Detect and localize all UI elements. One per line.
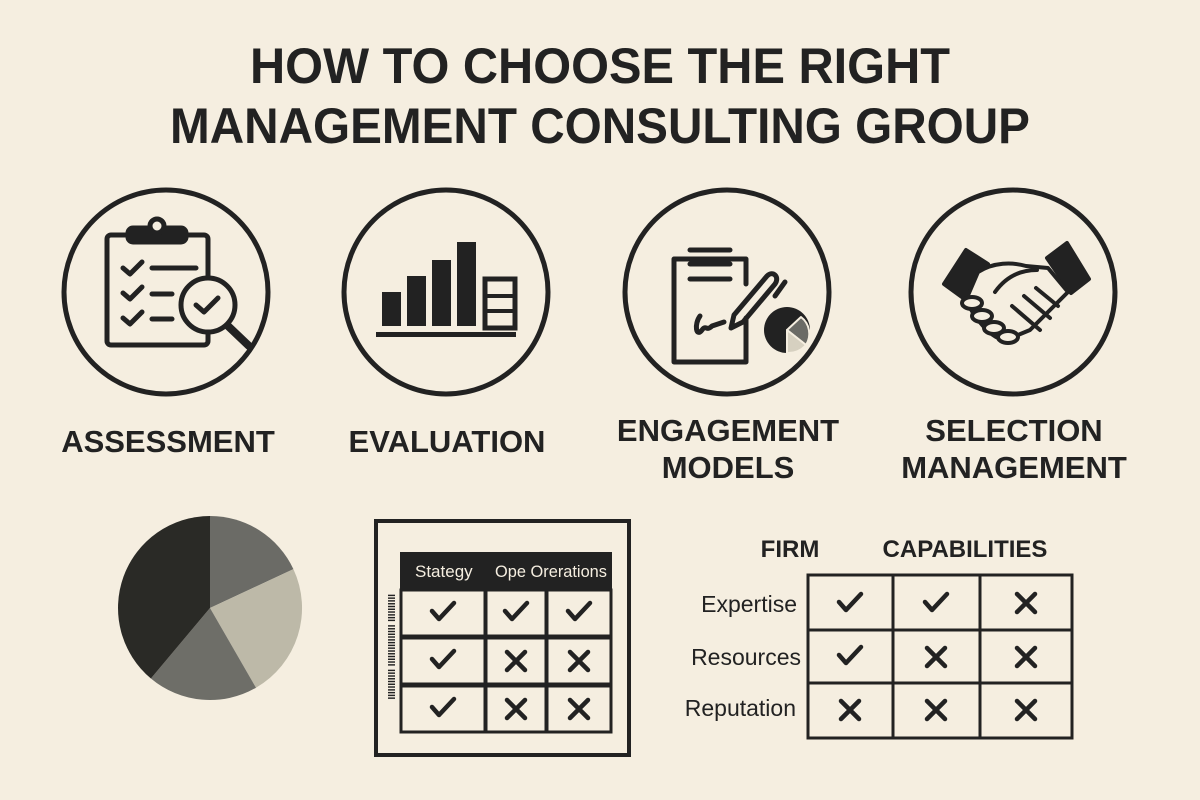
capabilities table: CAPABILITIES	[883, 536, 1047, 563]
capabilities table: FIRM	[761, 536, 819, 563]
icon: handshake	[911, 190, 1115, 394]
comparison table: strategy/operations: Stategy	[415, 562, 473, 581]
labels: ENGAGEMENT	[617, 413, 839, 448]
capabilities table: Reputation	[685, 695, 796, 721]
title: MANAGEMENT CONSULTING GROUP	[170, 98, 1030, 154]
labels: MANAGEMENT	[901, 450, 1127, 485]
labels: EVALUATION	[349, 424, 545, 459]
icon: assessment	[64, 190, 268, 394]
labels: SELECTION	[925, 413, 1103, 448]
labels: MODELS	[662, 450, 794, 485]
labels	[61, 413, 1127, 485]
icon: engagement models	[625, 190, 829, 394]
comparison table: strategy/operations: IIIIIIIIII IIIIIIIIIIIIIII IIIIIIIIIII	[385, 594, 396, 700]
comparison table: strategy/operations	[376, 521, 629, 755]
pie chart	[118, 516, 302, 700]
comparison table: strategy/operations: Ope Orerations	[495, 562, 607, 581]
icon: evaluation bar chart	[344, 190, 548, 394]
title: HOW TO CHOOSE THE RIGHT	[250, 38, 950, 94]
capabilities table: Resources	[691, 644, 801, 670]
title	[170, 38, 1030, 154]
capabilities table	[685, 536, 1072, 738]
labels: ASSESSMENT	[61, 424, 275, 459]
capabilities table: Expertise	[701, 591, 797, 617]
